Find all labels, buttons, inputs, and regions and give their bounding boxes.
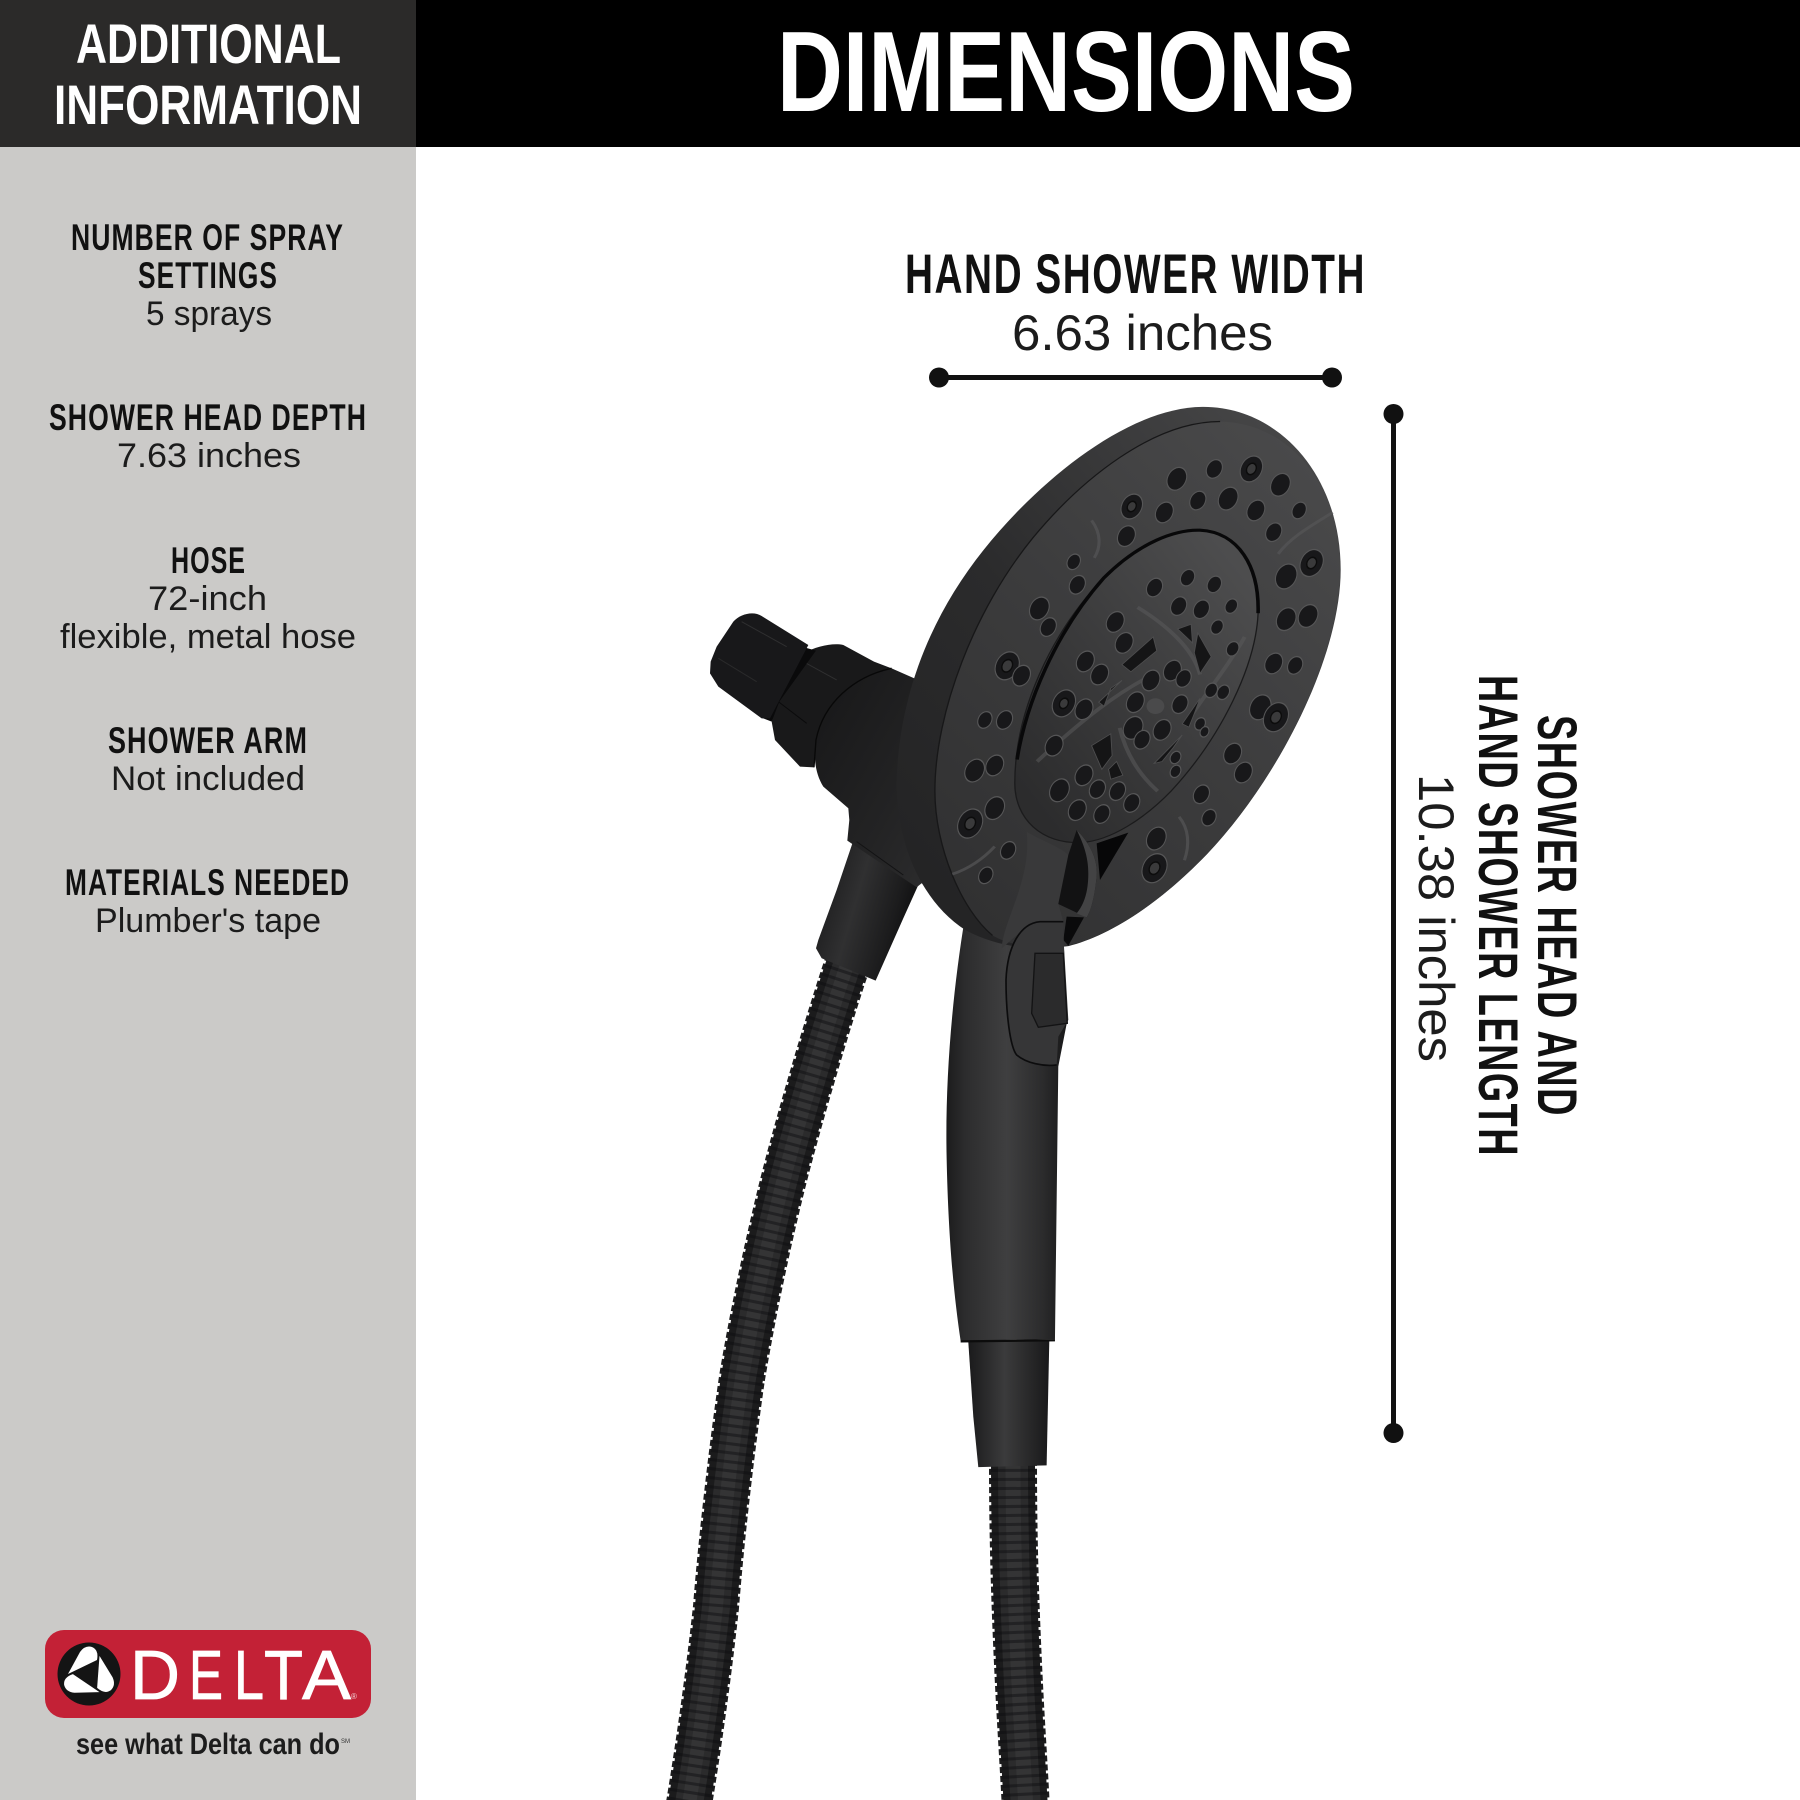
thread section: [761, 647, 816, 722]
slide button: [1032, 953, 1067, 1027]
spec: number of spray settings: NUMBER OF SPRAY: [71, 217, 344, 258]
label: shower head and hand shower length: 10.38 inches: [1408, 774, 1464, 1062]
panel: additional information sidebar: [0, 0, 416, 1800]
label: hand shower width: 6.63 inches: [1012, 305, 1273, 361]
arrow: width dimension line: [929, 368, 1342, 388]
wordmark: E: [189, 1636, 223, 1714]
spec: number of spray settings: 5 sprays: [146, 295, 272, 333]
hose to handle: [1013, 1460, 1026, 1800]
disk ridges: [1037, 607, 1245, 791]
spec: shower head depth: [49, 397, 367, 475]
tagline: see what Delta can do: [76, 1728, 340, 1761]
outer ring nozzles: [953, 453, 1327, 886]
tagline: SM: [341, 1739, 350, 1745]
clip: [1058, 830, 1097, 917]
arrow: length dimension line: [1384, 404, 1404, 1443]
icon: Delta triangle mark: [58, 1642, 123, 1706]
wordmark: D: [130, 1636, 180, 1714]
button housing: [1006, 922, 1068, 1065]
inner spray disk: [1015, 530, 1258, 843]
handle cradle, clip and slide button: [1002, 830, 1128, 1065]
wordmark: A: [302, 1636, 351, 1714]
wedge nozzles: [1092, 624, 1211, 779]
label: hand shower width: HAND SHOWER WIDTH: [905, 242, 1366, 305]
spec: hose: HOSE: [171, 540, 246, 581]
sidebar heading: [0, 0, 416, 147]
logo: Delta: ®: [351, 1692, 357, 1701]
spec: materials needed: Plumber's tape: [95, 902, 321, 940]
rim seam: [935, 422, 1220, 935]
cradle: [1002, 832, 1068, 948]
spec: shower head depth: 7.63 inches: [117, 437, 301, 475]
disk groove: [1017, 530, 1258, 759]
label: shower head and hand shower length: HAND SHOWER LENGTH: [1467, 675, 1530, 1157]
label: hand shower width: [905, 242, 1366, 361]
swivel nut: [772, 644, 892, 767]
mount body: [815, 668, 943, 897]
shower head: [897, 407, 1341, 948]
sidebar heading: ADDITIONAL: [76, 12, 341, 75]
arm mount, nut and elbow: [710, 613, 943, 981]
spec: shower arm: Not included: [111, 760, 305, 798]
logo: Delta: [45, 1630, 371, 1761]
head face: [935, 422, 1340, 947]
spec: number of spray settings: SETTINGS: [138, 255, 278, 296]
hose to elbow: [688, 962, 848, 1800]
title bar: dimensions: [416, 0, 1800, 147]
spec: hose: flexible, metal hose: [60, 618, 356, 656]
title bar: dimensions: DIMENSIONS: [777, 9, 1355, 136]
spec: shower arm: SHOWER ARM: [108, 720, 308, 761]
product: hand shower and shower head: [688, 407, 1341, 1800]
hand shower handle: [946, 911, 1067, 1467]
wordmark: [130, 1636, 351, 1714]
label: shower head and hand shower length: SHOWER HEAD AND: [1526, 715, 1589, 1117]
black notch: [1097, 833, 1128, 880]
outer ridges: [952, 512, 1333, 874]
spec: hose: [60, 540, 356, 656]
inner disk nozzles: [1042, 568, 1241, 825]
elbow connector: [816, 841, 918, 981]
spec: shower head depth: SHOWER HEAD DEPTH: [49, 397, 367, 438]
sidebar heading: INFORMATION: [54, 73, 362, 136]
spec: materials needed: [65, 862, 350, 940]
label: shower head and hand shower length: [1408, 675, 1589, 1157]
wordmark: T: [264, 1636, 303, 1714]
spec: shower arm: [108, 720, 308, 798]
connector cap: [710, 613, 808, 718]
head back rim: [897, 407, 1341, 948]
spec: materials needed: MATERIALS NEEDED: [65, 862, 350, 903]
wordmark: L: [234, 1636, 264, 1714]
spec: hose: 72-inch: [148, 580, 267, 618]
spec: number of spray settings: [71, 217, 344, 333]
center dimple: [1146, 698, 1164, 714]
